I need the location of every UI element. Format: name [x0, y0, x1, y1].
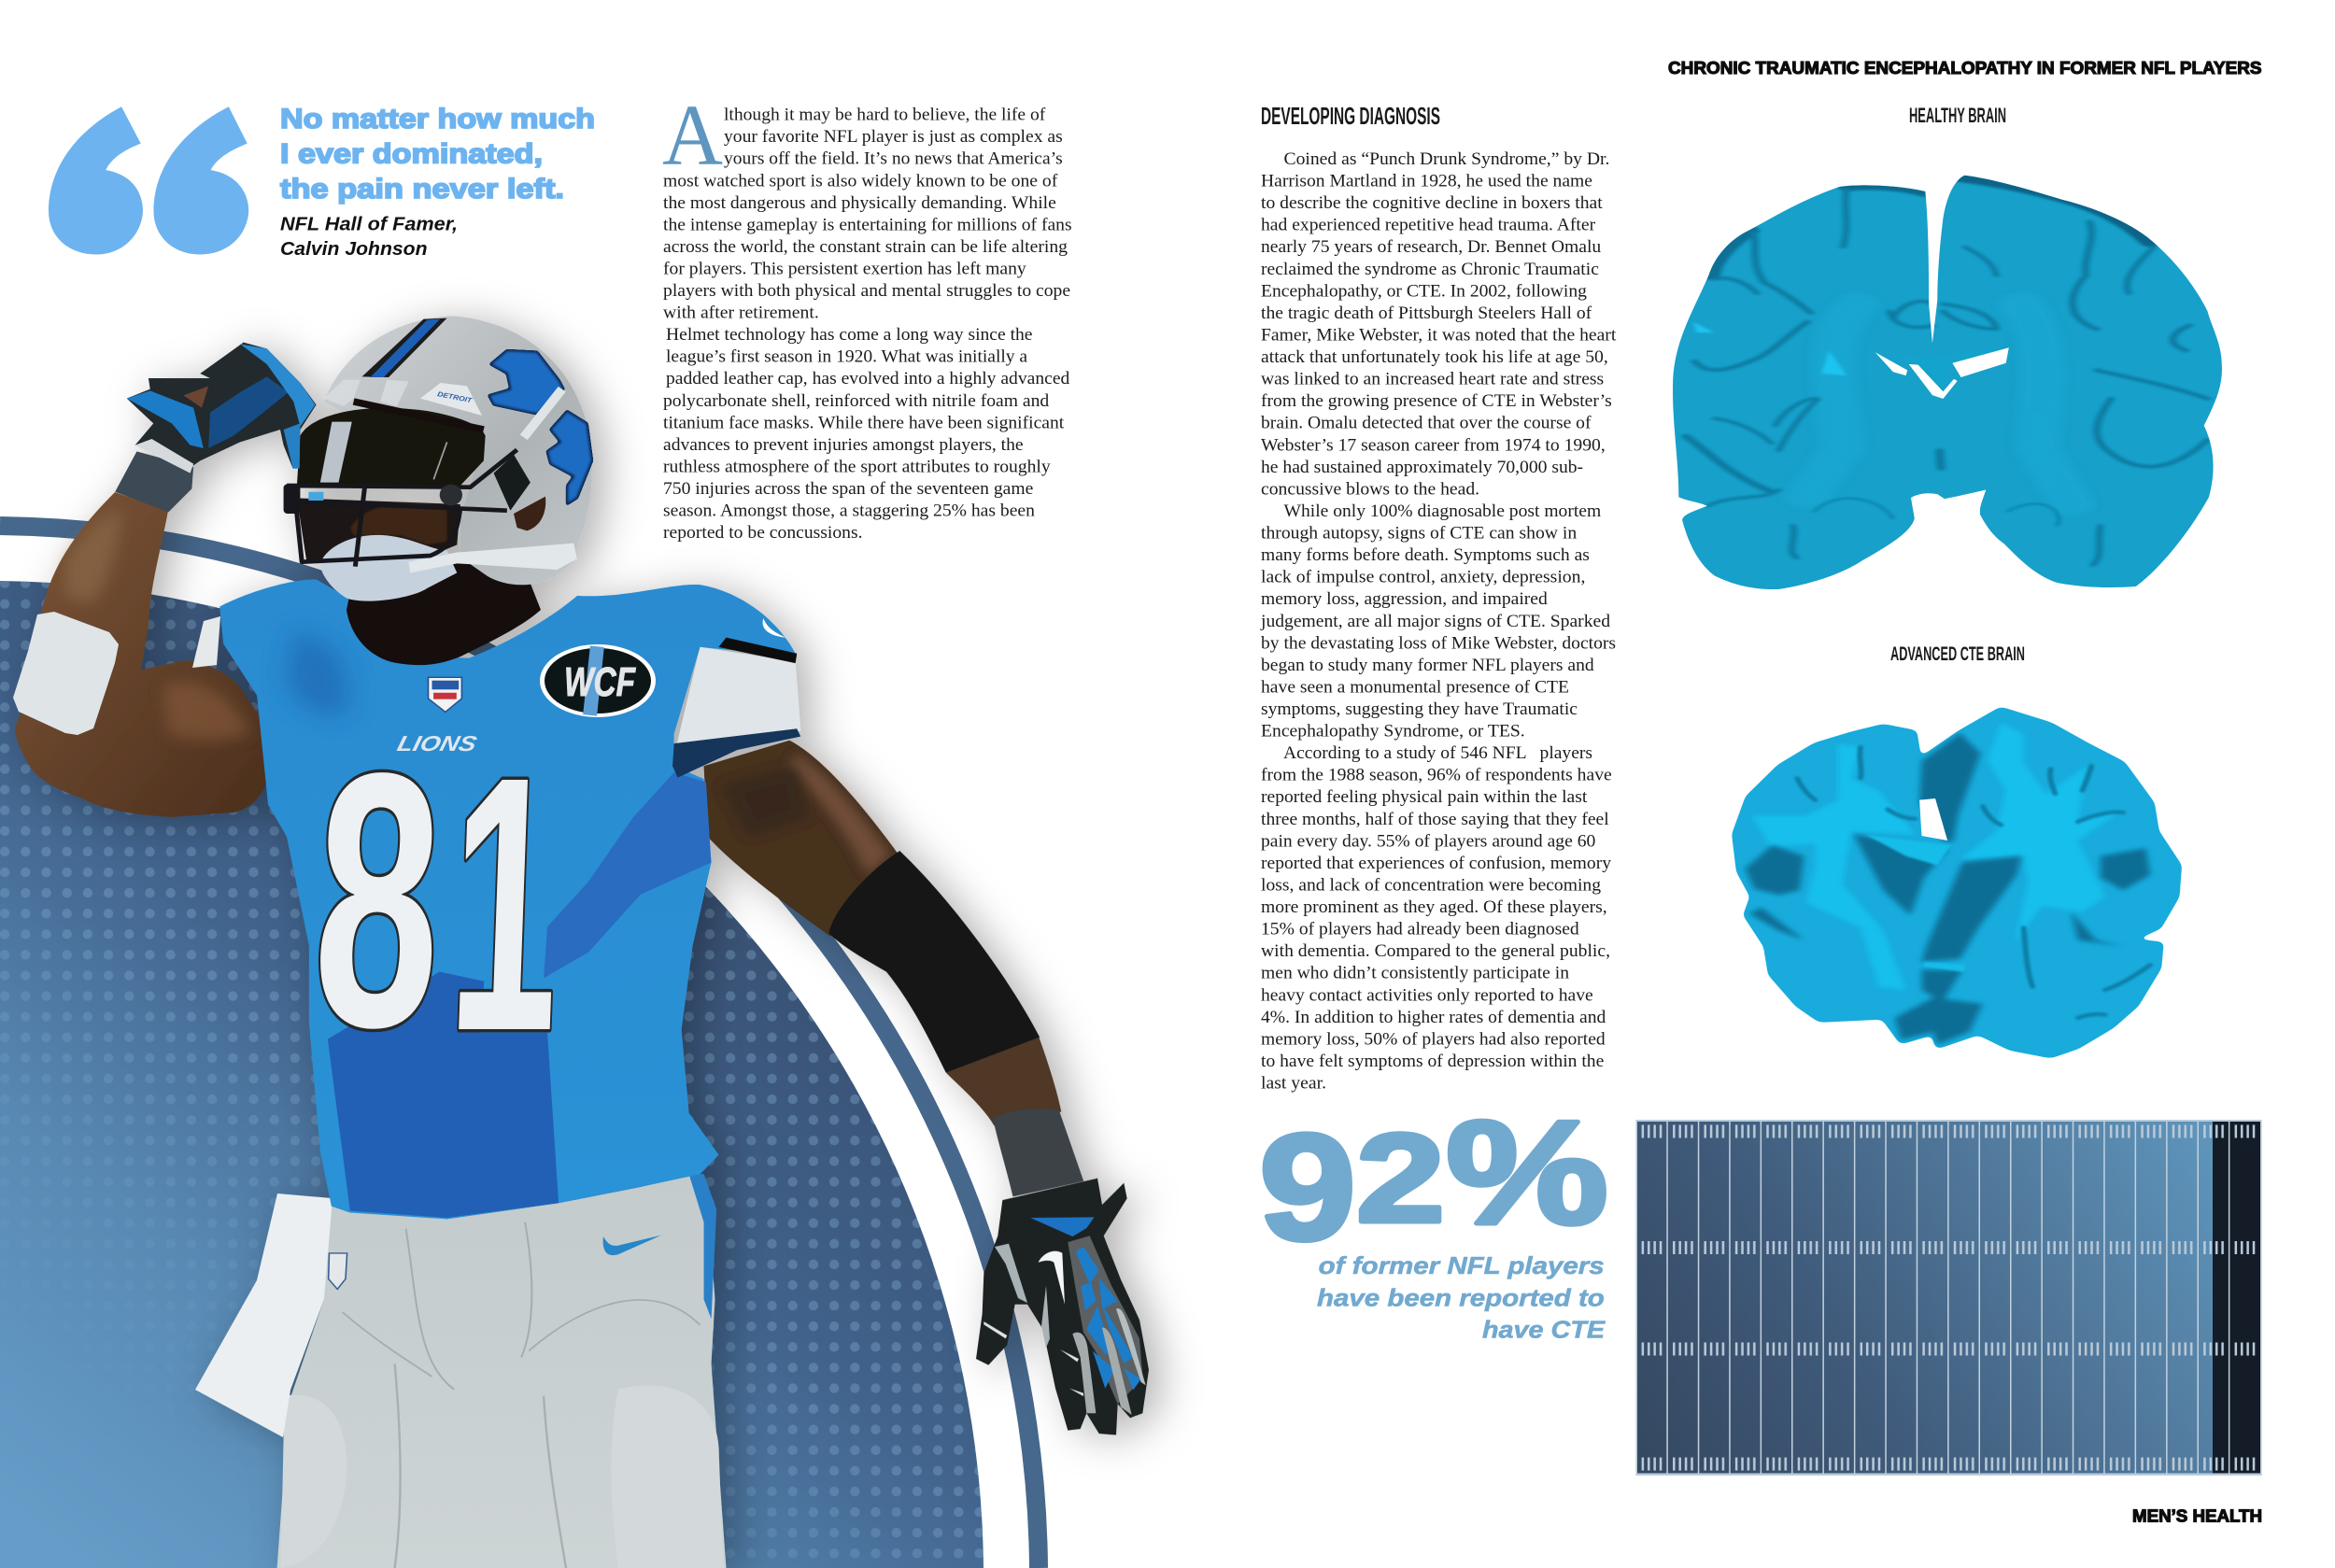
statistic caption	[1317, 1251, 1606, 1344]
right glove	[976, 1179, 1149, 1435]
body text: column two: three months, half of those saying that they feel	[1261, 810, 1609, 829]
brain ventricle gaps	[1875, 347, 2009, 399]
body text: column two: lack of impulse control, anxiety, depression,	[1261, 568, 1585, 587]
background: dotted blue circle panel	[0, 581, 984, 1568]
visor	[297, 408, 486, 486]
body text: column two: was linked to an increased heart rate and stress	[1261, 370, 1604, 389]
body text: column two: brain. Omalu detected that over the course of	[1261, 414, 1592, 433]
body text: column two: nearly 75 years of research, Dr. Bennet Omalu	[1261, 237, 1602, 257]
body text: column one: ruthless atmosphere of the sport attributes to roughly	[663, 457, 1051, 476]
central gap	[1919, 798, 1947, 841]
label: healthy brain: HEALTHY BRAIN	[1909, 104, 2006, 127]
body text: column one: league’s first season in 1920. What was initially a	[666, 347, 1028, 367]
body text: column two: memory loss, 50% of players had also reported	[1261, 1029, 1606, 1049]
body text: column one: yours off the field. It’s no news that America’s	[724, 149, 1063, 169]
NFL chest shield	[429, 677, 461, 712]
body text: column two: According to a study of 546 NFL players	[1283, 743, 1592, 763]
player right arm with black sleeve	[704, 741, 1083, 1196]
body text: column one: Helmet technology has come a long way since the	[666, 325, 1033, 345]
white tape on arm	[13, 612, 119, 735]
body text: column one: polycarbonate shell, reinforced with nitrile foam and	[663, 391, 1050, 411]
pull quote	[280, 104, 595, 205]
dark ventricles and folds	[1745, 733, 2150, 1044]
body text: column two: the tragic death of Pittsburgh Steelers Hall of	[1261, 304, 1592, 323]
body text: column two: he had sustained approximately 70,000 sub-	[1261, 458, 1583, 477]
body text: column two: reclaimed the syndrome as Chronic Traumatic	[1261, 260, 1599, 279]
body text: column two: Encephalopathy, or CTE. In 2002, following	[1261, 281, 1588, 301]
beard and neck	[347, 560, 541, 665]
body text: column one: the intense gameplay is entertaining for millions of fans	[663, 215, 1072, 234]
face below visor	[297, 498, 460, 563]
advanced CTE brain illustration	[1734, 708, 2180, 1057]
body text: column two: reported that experiences of confusion, memory	[1261, 854, 1612, 873]
statistic caption: have CTE	[1482, 1316, 1606, 1344]
body text: column two: men who didn’t consistently participate in	[1261, 964, 1570, 983]
body text: column two	[1260, 149, 1617, 1093]
body text: column one: reported to be concussions.	[663, 523, 863, 543]
body text: column two: have seen a monumental presence of CTE	[1261, 677, 1569, 697]
statistic caption: of former NFL players	[1319, 1251, 1605, 1279]
lion logo	[488, 350, 592, 504]
statistic 92%: 2	[1356, 1108, 1445, 1249]
body text: column two: had experienced repetitive head trauma. After	[1261, 216, 1596, 235]
jersey number 81: 1	[444, 702, 567, 1107]
quote attribution	[280, 214, 458, 260]
pull quote: the pain never left.	[280, 174, 564, 205]
body text: column one: advances to prevent injuries amongst players, the	[663, 435, 1024, 455]
NFL hip shield	[329, 1253, 347, 1289]
quote attribution: NFL Hall of Famer,	[280, 214, 458, 234]
statistic 92%	[1259, 1091, 1608, 1272]
body text: column two: loss, and lack of concentration were becoming	[1261, 876, 1602, 895]
body text: column two: judgement, are all major signs of CTE. Sparked	[1260, 612, 1611, 631]
body text: column two: with dementia. Compared to the general public,	[1261, 941, 1610, 961]
body text: column two: While only 100% diagnosable post mortem	[1283, 501, 1602, 521]
body text: column two: attack that unfortunately took his life at age 50,	[1261, 347, 1608, 367]
body text: column two: pain every day. 55% of players around age 60	[1261, 831, 1595, 851]
body text: column one: lthough it may be hard to believe, the life of	[724, 106, 1046, 125]
facemask bars	[287, 450, 517, 567]
body text: column two: from the 1988 season, 96% of respondents have	[1261, 766, 1612, 785]
dark blue jersey panels	[328, 971, 559, 1218]
player raised left arm	[13, 492, 273, 817]
body text: column two: Encephalopathy Syndrome, or TES.	[1261, 722, 1525, 742]
body text: column two: last year.	[1261, 1074, 1326, 1093]
running title: CHRONIC TRAUMATIC ENCEPHALOPATHY IN FORMER NFL PLAYERS	[1668, 58, 2262, 78]
heading: developing diagnosis: DEVELOPING DIAGNOSIS	[1261, 102, 1440, 130]
body text: column two: heavy contact activities only reported to have	[1261, 985, 1593, 1005]
white matter	[1752, 744, 1915, 990]
clear clips	[323, 380, 408, 406]
statistic caption: have been reported to	[1317, 1284, 1605, 1312]
body text: column one: padded leather cap, has evolved into a highly advanced	[666, 369, 1070, 388]
player jersey	[219, 580, 800, 1219]
drop cap A: A	[662, 88, 723, 184]
body text: column two: to describe the cognitive decline in boxers that	[1261, 193, 1604, 213]
body text: column two: began to study many former NFL players and	[1261, 656, 1594, 675]
body text: column one: your favorite NFL player is just as complex as	[724, 127, 1063, 147]
body text: column two: from the growing presence of CTE in Webster’s	[1261, 391, 1612, 411]
body text: column two: more prominent as they aged. Of these players,	[1261, 897, 1607, 917]
label: advanced CTE brain: ADVANCED CTE BRAIN	[1890, 643, 2025, 665]
jersey number 81	[308, 699, 567, 1107]
body text: column one: season. Amongst those, a staggering 25% has been	[663, 501, 1036, 521]
quote mark icon	[49, 106, 248, 254]
body text: column one: titanium face masks. While there have been significant	[663, 413, 1065, 432]
body text: column two: reported feeling physical pain within the last	[1261, 787, 1588, 807]
body text: column one	[663, 106, 1072, 543]
helmet: DETROIT	[436, 389, 474, 404]
body text: column two: Coined as “Punch Drunk Syndrome,” by Dr.	[1283, 149, 1609, 169]
body text: column two: by the devastating loss of Mike Webster, doctors	[1261, 633, 1616, 653]
body text: column one: 750 injuries across the span of the seventeen game	[663, 479, 1033, 499]
statistic 92%: 9	[1259, 1103, 1356, 1272]
quote attribution: Calvin Johnson	[280, 239, 428, 260]
body text: column two: memory loss, aggression, and impaired	[1261, 589, 1548, 609]
body text: column two: Harrison Martland in 1928, he used the name	[1261, 172, 1592, 191]
body text: column two: to have felt symptoms of depression within the	[1261, 1052, 1604, 1071]
chin cup	[320, 535, 457, 601]
body text: column two: 15% of players had already been diagnosed	[1261, 920, 1579, 939]
body text: column two: concussive blows to the head.	[1261, 479, 1479, 499]
raised hand and glove	[115, 343, 317, 512]
helmet stripes	[361, 318, 447, 377]
front bumper DETROIT	[420, 383, 482, 416]
arc ring around panel	[0, 526, 1039, 1568]
body text: column one: most watched sport is also widely known to be one of	[663, 171, 1058, 191]
jersey text LIONS: LIONS	[395, 731, 480, 756]
brain folds and white matter	[1686, 177, 2207, 565]
body text: column two: through autopsy, signs of CTE can show in	[1261, 523, 1578, 544]
body text: column two: Webster’s 17 season career from 1974 to 1990,	[1261, 435, 1606, 455]
white sleeve with black bands	[674, 647, 800, 756]
player illustration: Calvin Johnson, Lions 81	[13, 316, 1149, 1568]
body text: column one: across the world, the constant strain can be life altering	[663, 237, 1068, 257]
jersey number 81: 8	[308, 699, 447, 1103]
towel	[195, 1194, 332, 1437]
healthy brain illustration	[1673, 176, 2222, 589]
body text: column one: for players. This persistent exertion has left many	[663, 260, 1026, 278]
body text: column one: players with both physical and mental struggles to cope	[663, 281, 1070, 301]
WCF badge: WCF	[564, 659, 636, 705]
body text: column two: many forms before death. Symptoms such as	[1261, 545, 1590, 565]
helmet	[284, 316, 592, 601]
body text: column one: with after retirement.	[663, 304, 819, 323]
source: men's health: MEN’S HEALTH	[2132, 1505, 2262, 1526]
body text: column two: 4%. In addition to higher rates of dementia and	[1261, 1008, 1606, 1027]
statistic 92%: %	[1446, 1091, 1608, 1255]
body text: column two: symptoms, suggesting they have Traumatic	[1261, 699, 1578, 719]
body text: column one: the most dangerous and physically demanding. While	[663, 193, 1056, 213]
pull quote: I ever dominated,	[280, 138, 543, 169]
pull quote: No matter how much	[280, 104, 595, 134]
WCF badge	[540, 644, 656, 717]
body text: column two: Famer, Mike Webster, it was noted that the heart	[1261, 325, 1617, 346]
player pants	[277, 1174, 726, 1568]
football field percentage chart	[1635, 1120, 2262, 1476]
